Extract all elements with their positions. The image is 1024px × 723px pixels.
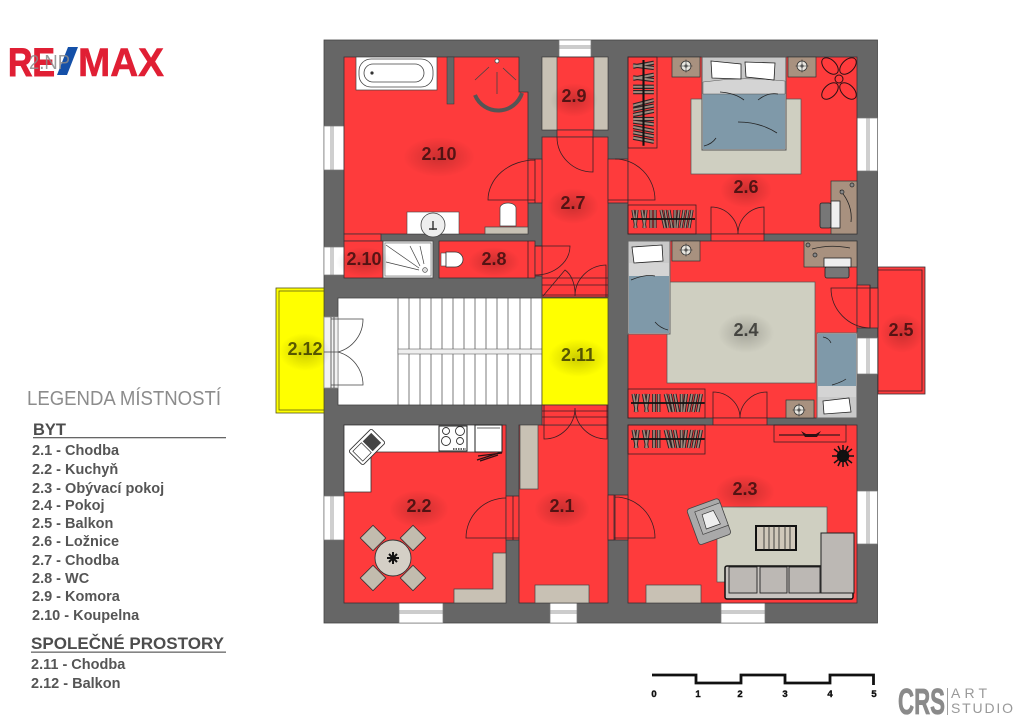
room 2.11 hall	[542, 298, 608, 405]
label 2.6: 2.6	[733, 177, 759, 197]
sink	[349, 429, 385, 465]
list: apartment rooms: 2.8 - WC	[32, 571, 90, 587]
plant	[832, 445, 854, 467]
label 2.10 lower: 2.10	[346, 249, 382, 269]
room 2.6 bedroom	[628, 55, 859, 234]
label 2.5: 2.5	[888, 320, 914, 340]
sink	[407, 212, 459, 237]
label 2.3	[715, 474, 775, 510]
stove	[439, 426, 467, 451]
list: apartment rooms: 2.1 - Chodba	[32, 443, 120, 459]
label 2.9: 2.9	[561, 86, 587, 106]
right bed	[817, 333, 857, 418]
corridor door nook	[608, 495, 628, 540]
label 2.10: 2.10	[421, 144, 457, 164]
label 2.6	[720, 172, 772, 208]
floor plan	[276, 40, 925, 623]
label 2.4: 2.4	[733, 320, 759, 340]
room labels	[279, 83, 924, 528]
label 2.10	[403, 137, 475, 177]
heading BYT: BYT	[33, 421, 66, 439]
scale bar	[651, 675, 877, 700]
label 2.9	[550, 83, 598, 117]
balcony door	[831, 285, 878, 328]
TV unit	[774, 425, 846, 442]
bathtub	[356, 57, 437, 90]
list: apartment rooms: 2.10 - Koupelna	[32, 608, 140, 624]
room 2.9 storage	[542, 57, 608, 137]
windows	[324, 40, 878, 623]
list: shared spaces: 2.12 - Balkon	[31, 676, 120, 692]
desk and chair	[820, 181, 857, 234]
door 2.6 to 2.4	[608, 159, 764, 241]
logo: RE/MAX	[8, 41, 164, 85]
rug	[717, 507, 827, 582]
label 2.7	[547, 188, 599, 224]
building walls	[324, 40, 878, 623]
rug	[691, 99, 801, 174]
wardrobes	[628, 57, 696, 234]
label 2.8	[468, 247, 520, 277]
cabinet	[646, 585, 701, 603]
floor label: 2.NP	[29, 52, 70, 74]
balcony 2.12	[276, 288, 324, 413]
logo: CRS art studio	[898, 681, 1013, 722]
rug	[667, 282, 815, 383]
label 2.11: 2.11	[561, 345, 595, 365]
room 2.4 room	[628, 241, 878, 418]
wardrobe	[628, 389, 705, 418]
shower tray	[383, 241, 433, 278]
WC bowl	[441, 252, 463, 267]
coffee table	[755, 525, 797, 551]
list: apartment rooms: 2.6 - Ložnice	[32, 534, 119, 550]
nightstands	[672, 241, 814, 418]
fridge	[475, 425, 502, 461]
partition wall	[447, 57, 454, 104]
label 2.2	[389, 490, 449, 528]
nightstands	[672, 57, 816, 77]
list: apartment rooms: 2.9 - Komora	[32, 589, 121, 605]
logo wordmark MAX: MAX	[78, 41, 164, 85]
staircase	[324, 298, 542, 405]
scale bar: 2	[737, 689, 743, 700]
room 2.10 bathroom	[344, 57, 528, 237]
room 2.7 corridor	[488, 137, 628, 297]
left bed	[628, 241, 670, 334]
doors	[488, 137, 608, 297]
heading shared spaces: SPOLEČNÉ PROSTORY	[31, 634, 224, 653]
list: apartment rooms: 2.2 - Kuchyň	[32, 462, 118, 478]
dining table and chairs	[360, 525, 426, 591]
armchair	[686, 498, 731, 545]
scale bar: 5	[871, 689, 877, 700]
balcony 2.5	[878, 267, 925, 394]
logo wordmark RE: RE	[8, 41, 55, 85]
room 2.8 WC	[439, 241, 535, 278]
toilet	[485, 203, 528, 234]
list: apartment rooms: 2.5 - Balkon	[32, 516, 113, 532]
list: apartment rooms: 2.7 - Chodba	[32, 553, 120, 569]
label 2.4	[718, 313, 774, 353]
plant	[819, 55, 859, 102]
label 2.12: 2.12	[287, 339, 323, 359]
double bed	[702, 57, 786, 150]
label 2.10 lower	[336, 247, 392, 277]
door to balcony 2.12	[324, 317, 363, 388]
door to hall	[542, 405, 608, 439]
scale bar: 4	[827, 689, 833, 700]
scale bar: 0	[651, 689, 657, 700]
sofa	[725, 533, 854, 599]
room 2.10 lower part	[344, 234, 433, 278]
list: apartment rooms: 2.3 - Obývací pokoj	[32, 481, 164, 497]
label 2.1	[534, 490, 590, 528]
logo: CRS art studio: STUDIO	[951, 700, 1013, 716]
legend title: LEGENDA MÍSTNOSTÍ	[27, 387, 221, 410]
scale bar: 3	[782, 689, 788, 700]
logo: CRS art studio: CRS	[898, 681, 945, 722]
label 2.5	[880, 313, 924, 353]
label 2.2: 2.2	[406, 496, 432, 516]
desk and chair	[804, 241, 857, 278]
room 2.3 living room	[608, 425, 857, 603]
label 2.1: 2.1	[549, 496, 575, 516]
logo: CRS art studio: ART	[951, 685, 987, 701]
label 2.8: 2.8	[481, 249, 507, 269]
label 2.11	[548, 339, 608, 377]
scale bar: 1	[695, 689, 701, 700]
door 2.4 to 2.3	[713, 392, 767, 425]
shower arc	[475, 59, 522, 111]
L-shaped unit	[454, 553, 506, 603]
label 2.7: 2.7	[560, 193, 586, 213]
wardrobe	[628, 425, 705, 454]
list: apartment rooms: 2.4 - Pokoj	[32, 498, 105, 514]
counter	[344, 425, 502, 492]
list: shared spaces: 2.11 - Chodba	[31, 657, 126, 673]
logo slash	[57, 47, 78, 75]
room 2.1 hallway	[519, 405, 614, 603]
list: shared spaces	[31, 657, 126, 692]
room 2.2 kitchen	[344, 425, 519, 603]
list: apartment rooms	[32, 443, 164, 624]
label 2.12	[279, 333, 331, 371]
legend	[27, 387, 226, 692]
label 2.3: 2.3	[732, 479, 758, 499]
